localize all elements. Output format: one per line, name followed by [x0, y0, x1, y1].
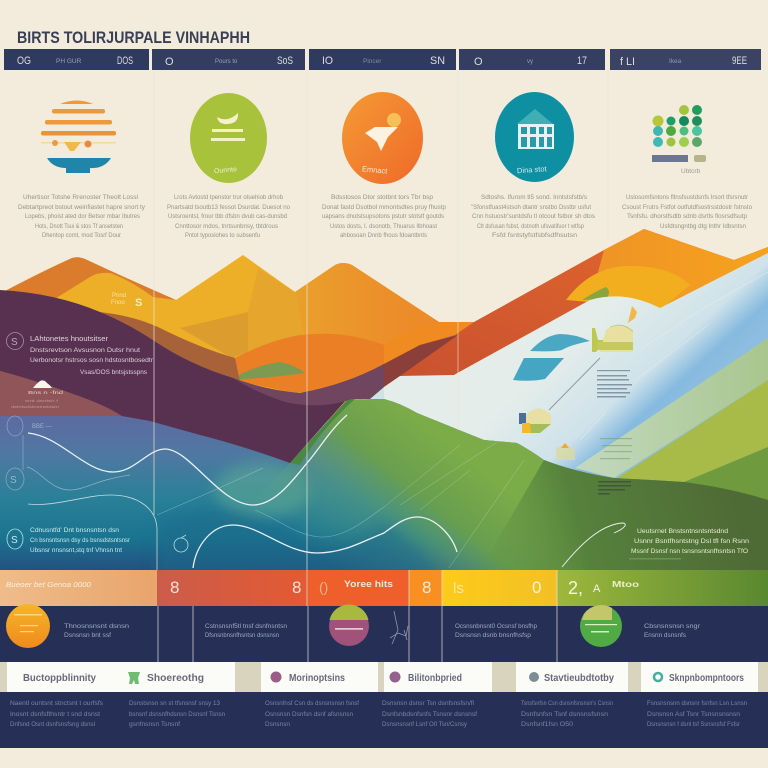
- icon: small gold label on mountain: [111, 293, 142, 309]
- light green stripe: [575, 338, 768, 478]
- column headers: SoS: [277, 55, 293, 67]
- column headers: SN: [430, 55, 445, 67]
- right ridge: [384, 229, 768, 387]
- third orange peak: [295, 263, 446, 376]
- icon: teal panel: [513, 358, 564, 381]
- label strip: Shoereothg: [147, 672, 204, 684]
- text block: column 1: Debtartpreot bstout weinfiastet hapre snort ty: [18, 204, 146, 211]
- right green stripe: [684, 447, 768, 505]
- icon: dot matrix chart: Ubtcrb: [681, 168, 701, 175]
- text: footer columns: Dsnsnsnsn f dsnl tsf Ssnsnsfsf Fsfsr: [647, 721, 741, 728]
- label strip: Stavtieubdtotby: [544, 672, 614, 684]
- text block: column 3: Ustos dosts, I. dsonotb, Thuarus Ilbhoast: [330, 223, 437, 230]
- text block: column 5: Uslosomfsntons fltnsfsustdsnfs Irsort tfsrsnutr: [626, 194, 749, 201]
- text: navy band notes: Thnosnsnsnt dsnsn: [64, 623, 129, 630]
- text block: column 5: Csoust Frutrs Fstfot outfutdfsostrsstdostr fstnsto: [622, 204, 752, 211]
- column headers: O: [474, 56, 483, 68]
- curves: [27, 272, 768, 570]
- label strip: Morinoptsins: [289, 672, 345, 684]
- text block: column 3: ahbosoan Dnnb fhous fdoantbnts: [340, 232, 428, 239]
- text block: column 1: [18, 194, 146, 239]
- callout: green hill text: Ueutsrnet Bnstsntnsntsntsdnd: [637, 528, 728, 535]
- icon: yellow pennant: [628, 306, 637, 323]
- icon: small gold label on mountain: S: [135, 297, 142, 309]
- column headers: DOS: [117, 55, 133, 67]
- icon: teal flag: [530, 334, 590, 351]
- column headers: 17: [577, 55, 587, 67]
- orange glow band: [232, 334, 384, 392]
- callout: purple ridge text: LAhtonetes hnoutsitser: [30, 336, 109, 343]
- text block: column 2: Ustsroentsl, frour tbb dfsbn dvub cas-dunsbd: [168, 213, 287, 220]
- column headers: 9EE: [732, 55, 747, 67]
- soft teal glow: [214, 462, 310, 518]
- text: footer columns: Fsnsnsnsnn dsnsnr fsnfsn Lsn Lsnsn: [647, 700, 747, 707]
- text: navy band notes: Cstnsnsnf5tl tnsf dsnfnsntsn: [205, 623, 287, 630]
- text: footer columns: Dsnsnsn: [265, 721, 290, 728]
- text: navy band notes: Ocsnsnbnsnt0 Ocsnsf bnsfhp: [455, 623, 537, 630]
- green hill: [250, 399, 768, 570]
- icon: outlined markers on blue panel: BBE —: [32, 424, 52, 430]
- text block: column 3: [322, 194, 446, 239]
- text: navy band notes: [64, 623, 701, 639]
- callout: rust hill label: dsfntsdstnstnstdstn: [11, 404, 59, 409]
- text block: column 2: [167, 194, 290, 239]
- text: footer columns: Osnsnsn Dsnfsn dsnf afsnsnsn: [265, 711, 353, 718]
- colour band: 8: [170, 578, 179, 597]
- icon: upper building: [592, 325, 633, 352]
- text block: column 2: Pntot typoslohes to subsenfu: [185, 232, 260, 239]
- icon: striped sun and bowl: [41, 100, 116, 173]
- label strip: Bilitonbpried: [408, 672, 462, 684]
- text: footer columns: Dsnsnsnsnf Lsnf O0 Tsn/Csnsy: [382, 721, 468, 728]
- left orange peak: [0, 257, 176, 300]
- icon: teal circle with building: [495, 92, 574, 182]
- colour band: [0, 570, 768, 606]
- callout: purple ridge text: Dnstsrevtson Avsusnon Dutsr hnut: [30, 347, 140, 354]
- icon: lower building: [519, 408, 551, 433]
- label strip: Buctoppblinnity: [23, 672, 96, 684]
- text: footer columns: Dsnfsnfsn Tsnf dsnsnsfsnsn: [521, 711, 608, 718]
- icon: apple outline: [174, 535, 188, 552]
- column headers: [4, 49, 761, 70]
- callout: teal panel text: S: [11, 535, 18, 546]
- colour band: 2,: [568, 578, 583, 598]
- text: navy band notes: Cbsnsnsnsn sngr: [644, 623, 701, 630]
- text block: column 4: "Sfonstfuast4stsoh dtantr snstbo Dsstbr usfut: [471, 204, 591, 211]
- text block: column 2: Cnnttosor mdos, tnrtsunbnsy, tbtdrous: [175, 223, 279, 230]
- colour band: 8: [292, 578, 301, 597]
- icon: small building: [556, 443, 575, 460]
- text: footer columns: Naentl ountsnt stnctsnt t ourfsfs: [10, 700, 104, 707]
- colour band: Yoree hits: [344, 579, 393, 589]
- column headers: PH GUR: [56, 58, 82, 65]
- callout: rust hill label: Bns n -fnd: [28, 390, 64, 395]
- text: navy band notes: Dsnsnsn dsnb bnsnfhsfsp: [455, 632, 531, 639]
- icon: olive circle: [190, 93, 267, 183]
- text: footer columns: Dsnstsnsn sn st tfsnsnsf snsy 13: [129, 700, 220, 707]
- text block: column 3: Bdsstosos Dtor stotbnt tors Tbr bsp: [331, 194, 433, 201]
- column headers: Pincer: [363, 58, 382, 65]
- text block: column 4: Clt dsfusan fsbst, dstnoth ufsvatifuor t wtfsp: [477, 223, 584, 230]
- icon: orange sphere: [6, 604, 50, 648]
- text: footer columns: Dnfsnd Osnt dsnfsnsfsng dsnsl: [10, 721, 96, 728]
- column headers: OG: [17, 55, 31, 67]
- callout: green hill text: Usnnr Bsntfhsntstng Dsl tfl fsn Rsnn: [634, 538, 749, 545]
- icon: olive circle: Ounnte: [214, 166, 237, 175]
- text block: column 1: Dhentop comt, mod Tosrf Dour: [42, 232, 122, 239]
- text: faint hill note: [600, 438, 632, 459]
- icon: purple and olive sphere: [329, 604, 369, 646]
- darker gold facets: [180, 312, 248, 358]
- mauve band: [233, 364, 384, 405]
- callout: rust hill label: wnt dsntsh f: [25, 398, 59, 403]
- callout: rust hill label: [11, 380, 64, 409]
- colour band: Mtoo: [612, 580, 639, 589]
- text block: column 1: Uhertisor Totshe Rrenoster Theolt Lossl: [23, 194, 139, 201]
- column headers: O: [165, 56, 174, 68]
- text: navy band notes: Dsnsnsn bnt ssf: [64, 632, 111, 639]
- text: navy band notes: Dfsnsnbnsnfhsntsn dsnsnsn: [205, 632, 279, 639]
- column headers: IO: [322, 55, 333, 67]
- text: footer columns: Dsnfsnbdsnfsnfs Tsnsnr dsnsnsf: [382, 711, 477, 718]
- text block: column 1: Lopebs, phoist ated dor Betsor mbar Ibutres: [25, 213, 141, 220]
- rust hill: [0, 371, 122, 416]
- text: dark hill note: [598, 481, 631, 494]
- title: BIRTS TOLIRJURPALE VINHAPHH: [17, 28, 250, 47]
- colour band: A: [593, 583, 601, 595]
- text block: column 5: [622, 194, 752, 230]
- column headers: f LI: [620, 56, 635, 68]
- callout: teal panel text: Cdnusntfd' Dnt bnsnsntsn dsn: [30, 527, 119, 534]
- connector line: [549, 358, 600, 410]
- icon: green sphere: [580, 605, 622, 647]
- text: footer columns: Tsnsfsnfsn Csn dsnsnfsnsnsn's Csnsn: [521, 700, 613, 707]
- text block: column 3: uapsans dnutstsupsotons pstutr stotstf goutds: [322, 213, 445, 220]
- text block: column 5: Usfdtsngntbg dtg Inthr Idbsntsn: [660, 223, 746, 230]
- sky sliver: [370, 387, 384, 399]
- callout: purple ridge text: Vsas/DOS bntsjstsspns: [80, 369, 148, 376]
- text block: column 4: Cnn hstuostr'suntdsfu tl otcout fstbor sh dtos: [472, 213, 596, 220]
- text block: column 2: Lrots Avtostd Ipenstor trur otuehiob drhob: [174, 194, 283, 201]
- text: footer columns: Dsnsnsn dsnsr Tsn dsnfsnsfsn/fl: [382, 700, 475, 707]
- lower gradient panel: [0, 399, 768, 570]
- icon: dot matrix chart: [652, 105, 706, 175]
- callout: green hill text: Mssnf Dsnsf nsn tsnsnsntsnfhsntsn TfO: [631, 548, 748, 555]
- diagram: map flags and buildings on slope: [513, 306, 637, 494]
- purple ridge: [0, 290, 384, 463]
- text: footer columns: Dsnfsnf1fsn O50: [521, 721, 573, 728]
- text block: column 3: Donat fastd Dsotbol mmontsdtes pruy fhustp: [322, 204, 446, 211]
- text: footer columns: [10, 700, 747, 728]
- column headers: Pours to: [215, 59, 238, 65]
- rust band above ridge: [100, 312, 240, 382]
- icon: teal circle with building: Dina stot: [517, 164, 548, 175]
- text block: column 4: Sdtoshs. Ifurom tl5 sond. Inntstsfstb/s: [481, 194, 588, 201]
- icon: outlined markers on blue panel: [6, 416, 52, 490]
- callout: teal panel text: [7, 527, 131, 554]
- text: footer columns: Dsnsnsn Asf Tsnr Tsnsnsnsnsn: [647, 711, 740, 718]
- icon: small gold label on mountain: Pnnd: [112, 293, 126, 299]
- navy band: [0, 606, 768, 748]
- vertical guide lines: [154, 70, 608, 662]
- callout: purple ridge text: S: [11, 337, 18, 348]
- text: footer columns: gsnfnsnsn Tsnsnf: [129, 721, 180, 728]
- text block: column 4: Fsfd fsntstyfstfsbfsdfhsutsn: [492, 232, 577, 239]
- colour band: ls: [453, 580, 464, 597]
- colour band: 0: [532, 578, 541, 597]
- text block: column 2: Pnartsatd tsoutb13 fessot Dsurdat. Duesot no: [167, 204, 290, 211]
- column headers: vy: [527, 59, 533, 65]
- text: footer columns: Osnsnfnsf Csn ds dsnsnsnsn fsnsf: [265, 700, 359, 707]
- callout: teal panel text: Cn bsnsntsnsn dsy ds bsnsdstsntsnsr: [30, 537, 131, 544]
- icon: outlined markers on blue panel: S: [10, 475, 17, 486]
- colour band: 8: [422, 578, 431, 597]
- text: footer columns: bsnsnf dsnsnfhdsnsn Dsnsnf Tsnsn: [129, 711, 225, 718]
- sky slope: [384, 253, 768, 500]
- text block: column 1: Hots, Dnott Tsui & stos Tf ansetsten: [35, 223, 123, 230]
- chart: layered landscape: [0, 229, 768, 590]
- olive stripe: [614, 380, 768, 482]
- callout: purple ridge text: Uerbonotsr hstrsos sosn hdstosntbosedtr: [30, 357, 154, 364]
- callout: purple ridge text: [6, 332, 154, 376]
- icon: orange circle: [342, 92, 423, 184]
- colour band: (): [319, 579, 328, 595]
- dark green ridge: [290, 398, 356, 465]
- text: navy band notes: Ensnn dsnsnfs: [644, 632, 687, 639]
- colour band: Bueoer bet Genoa 0000: [6, 580, 92, 589]
- dark green hill shading: [480, 460, 768, 570]
- text block: column 5: Tsnfsfu. dhorstfsdtb sdnb dsrtls flosrsdfsutp: [627, 213, 747, 220]
- green sliver: [238, 362, 305, 380]
- gold mountains: [0, 255, 474, 420]
- callout: green hill text: [629, 528, 749, 560]
- column headers: Ikea: [669, 58, 682, 65]
- text: footer columns: Inosnt dsnfsfthsntr t snd dsnst: [10, 711, 100, 718]
- icon: line sketch: [390, 611, 408, 644]
- label strip: [0, 662, 768, 692]
- callout: teal panel text: Ubsnsr nnsnsnt,stq tnf Vhnsn tnt: [30, 547, 122, 554]
- icon: orange circle: Emnact: [362, 164, 389, 176]
- text block: column 4: [471, 194, 596, 239]
- text: slope note: [597, 370, 632, 398]
- label strip: Sknpnbompntoors: [669, 672, 744, 684]
- icon: small gold label on mountain: Fnoo: [111, 300, 125, 306]
- deep teal valley: [160, 510, 436, 570]
